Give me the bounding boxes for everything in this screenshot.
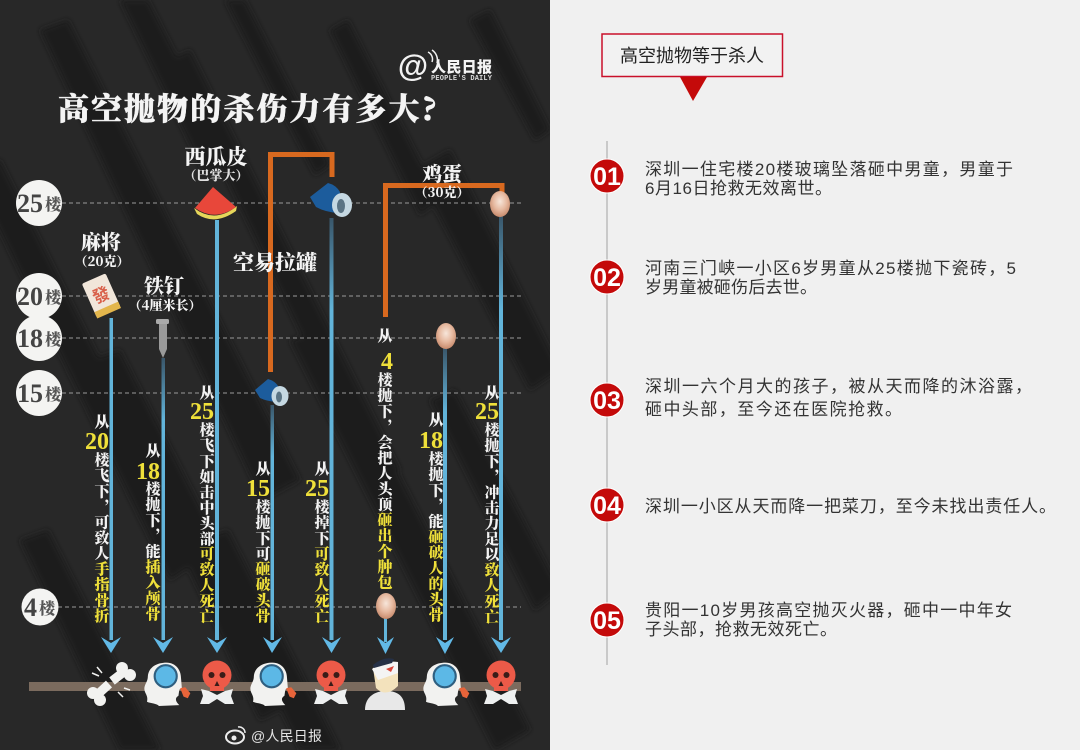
logo: People's Daily: @ (398, 48, 428, 83)
orange bracket: cans (270, 154, 332, 372)
caption column: nail: 楼抛下，能 插入颅骨 (142, 480, 164, 622)
floor marker: 20楼: 20 (17, 282, 43, 311)
icon: egg on 25th floor (490, 191, 510, 217)
label: 鸡蛋 (415, 158, 469, 201)
list item 01 (590, 159, 1013, 198)
list item 05: 05 (593, 607, 621, 635)
icon: mahjong tile (82, 273, 121, 319)
title: 高空抛物的杀伤力有多大? (58, 84, 437, 129)
floor marker: 25楼: 楼 (45, 192, 63, 215)
list item 03 (590, 377, 1032, 419)
floor marker: 25楼: 25 (17, 189, 43, 218)
list item 04: 深圳一小区从天而降一把菜刀，至今未找出责任人。 (645, 497, 1056, 516)
heading box: 高空抛物等于杀人 (620, 46, 764, 66)
caption column: can from 25th floor: 25 (305, 476, 329, 502)
label: 铁钉: 铁钉 (144, 270, 184, 299)
floor marker: 18楼 (16, 315, 63, 361)
panel: falling objects infographic background (0, 0, 560, 750)
heading pointer triangle (680, 77, 707, 101)
list item 01: 6月16日抢救无效离世。 (645, 179, 832, 198)
icon: skull (314, 660, 348, 704)
caption column: can from 15th floor (246, 461, 274, 624)
list item 02 (590, 259, 1016, 297)
caption column: can from 15th floor: 从 (252, 461, 274, 477)
list item 04 (590, 488, 1056, 522)
floor marker: 15楼: 15 (17, 379, 43, 408)
caption column: mahjong: 从 (92, 414, 112, 430)
icon: skull (484, 660, 518, 704)
arrow: egg from 18th floor (436, 348, 454, 654)
floor marker: 20楼 (16, 273, 63, 319)
floor marker: 15楼: 楼 (45, 382, 63, 405)
arrow: can from 15th floor (263, 405, 282, 653)
arrow: mahjong (101, 318, 121, 653)
list item 02: 02 (593, 264, 621, 292)
caption column: can from 15th floor: 楼抛下可 砸破头骨 (252, 498, 274, 624)
weibo credit (226, 727, 322, 744)
caption column: egg from 18th floor: 从 (426, 412, 446, 428)
label: 西瓜皮: 西瓜皮 (184, 141, 248, 171)
logo: People's Daily (398, 48, 493, 83)
icon: nail (156, 319, 169, 358)
label: 铁钉 (129, 270, 201, 314)
floor marker: 18楼: 18 (17, 324, 43, 353)
icon: injured head (250, 663, 296, 706)
arrow: egg from 25th floor (491, 216, 511, 653)
list item 03: 深圳一六个月大的孩子，被从天而降的沐浴露， (645, 377, 1032, 396)
list item 02: 岁男童被砸伤后去世。 (645, 278, 817, 297)
caption column: egg from 4th floor: 从 (374, 328, 396, 344)
arrow: egg from 4th floor (377, 618, 394, 654)
caption column: watermelon rind: 从 (196, 385, 218, 401)
caption column: egg from 25th floor: 从 (482, 385, 502, 401)
heading box (602, 34, 782, 76)
caption column: mahjong: 楼飞下，可致人 手指骨折 (92, 451, 112, 624)
floor marker: 4楼: 楼 (39, 596, 57, 619)
panel: right text background (550, 0, 1080, 750)
caption column: can from 15th floor: 15 (246, 476, 270, 502)
floor marker: 4楼 (22, 588, 58, 626)
caption column: can from 25th floor (305, 461, 332, 623)
label: 鸡蛋: （30克） (415, 182, 469, 201)
arrow: nail (153, 358, 173, 653)
list item 02: 河南三门峡一小区6岁男童从25楼抛下瓷砖，5 (645, 259, 1016, 278)
caption column: can from 25th floor: 从 (312, 461, 332, 477)
floor marker: 20楼: 楼 (45, 285, 63, 308)
icon: broken bone (87, 662, 136, 706)
caption column: egg from 25th floor (475, 385, 502, 624)
caption column: egg from 4th floor: 楼抛下，会把人头顶 砸出个肿包 (374, 371, 396, 590)
label: 鸡蛋: 鸡蛋 (422, 158, 463, 187)
logo: People's Daily: 人民日报 (431, 56, 492, 77)
icon: person with bump (365, 658, 405, 710)
icon: egg on 4th floor (376, 593, 396, 619)
list item 01: 01 (593, 163, 621, 191)
label: 空易拉罐: 空易拉罐 (233, 247, 317, 277)
icon: injured head (423, 663, 469, 706)
caption column: nail: 从 (142, 443, 164, 459)
floor marker: 15楼 (16, 370, 63, 416)
label: 麻将 (75, 226, 129, 270)
arrow: can from 25th floor (322, 218, 341, 653)
label: 西瓜皮: （巴掌大） (183, 165, 249, 184)
label: 铁钉: （4厘米长） (129, 295, 201, 314)
floor marker: 25楼 (16, 180, 63, 226)
icon: can on 15th floor (255, 379, 288, 406)
list item 05: 贵阳一10岁男孩高空抛灭火器，砸中一中年女 (645, 601, 1012, 620)
caption column: egg from 18th floor (419, 412, 446, 623)
arrow: watermelon rind (207, 220, 227, 653)
caption column: egg from 18th floor: 18 (419, 428, 443, 454)
icon: can on 25th floor (310, 183, 352, 217)
caption column: watermelon rind: 25 (190, 399, 214, 425)
icon: mahjong tile: 發 (88, 279, 113, 309)
caption column: mahjong (85, 414, 112, 624)
icon: skull (200, 660, 234, 704)
caption column: mahjong: 20 (85, 429, 109, 455)
caption column: watermelon rind (190, 385, 218, 624)
caption column: egg from 18th floor: 楼抛下，能 砸破人的头骨 (426, 450, 446, 623)
label: 麻将: （20克） (75, 251, 129, 270)
caption column: watermelon rind: 楼飞下如击中头部 可致人死亡 (196, 421, 218, 624)
logo: People's Daily: PEOPLE'S DAILY (431, 75, 493, 83)
label: 西瓜皮 (183, 141, 249, 184)
caption column: egg from 25th floor: 楼抛下，冲击力足以 致人死亡 (482, 421, 502, 624)
list item 03: 砸中头部，至今还在医院抢救。 (645, 400, 902, 419)
ground bar (29, 682, 521, 691)
orange bracket: eggs (386, 186, 502, 317)
caption column: nail: 18 (136, 459, 160, 485)
list item 03: 03 (593, 387, 621, 415)
list item 05 (590, 601, 1012, 639)
list item 05: 子头部，抢救无效死亡。 (645, 620, 837, 639)
caption column: nail (136, 443, 164, 622)
icon: egg on 18th floor (436, 323, 456, 349)
list item 04: 04 (593, 492, 621, 520)
icon: injured head (144, 663, 190, 706)
icon: watermelon (194, 187, 237, 219)
caption column: egg from 4th floor: 4 (381, 349, 393, 375)
list item 01: 深圳一住宅楼20楼玻璃坠落砸中男童，男童于 (645, 160, 1013, 179)
weibo credit: @人民日报 (251, 728, 322, 744)
caption column: egg from 25th floor: 25 (475, 399, 499, 425)
caption column: can from 25th floor: 楼掉下 可致人死亡 (312, 498, 332, 623)
floor marker: 18楼: 楼 (45, 327, 63, 350)
label: 麻将: 麻将 (81, 226, 121, 255)
floor marker: 4楼: 4 (24, 593, 37, 622)
